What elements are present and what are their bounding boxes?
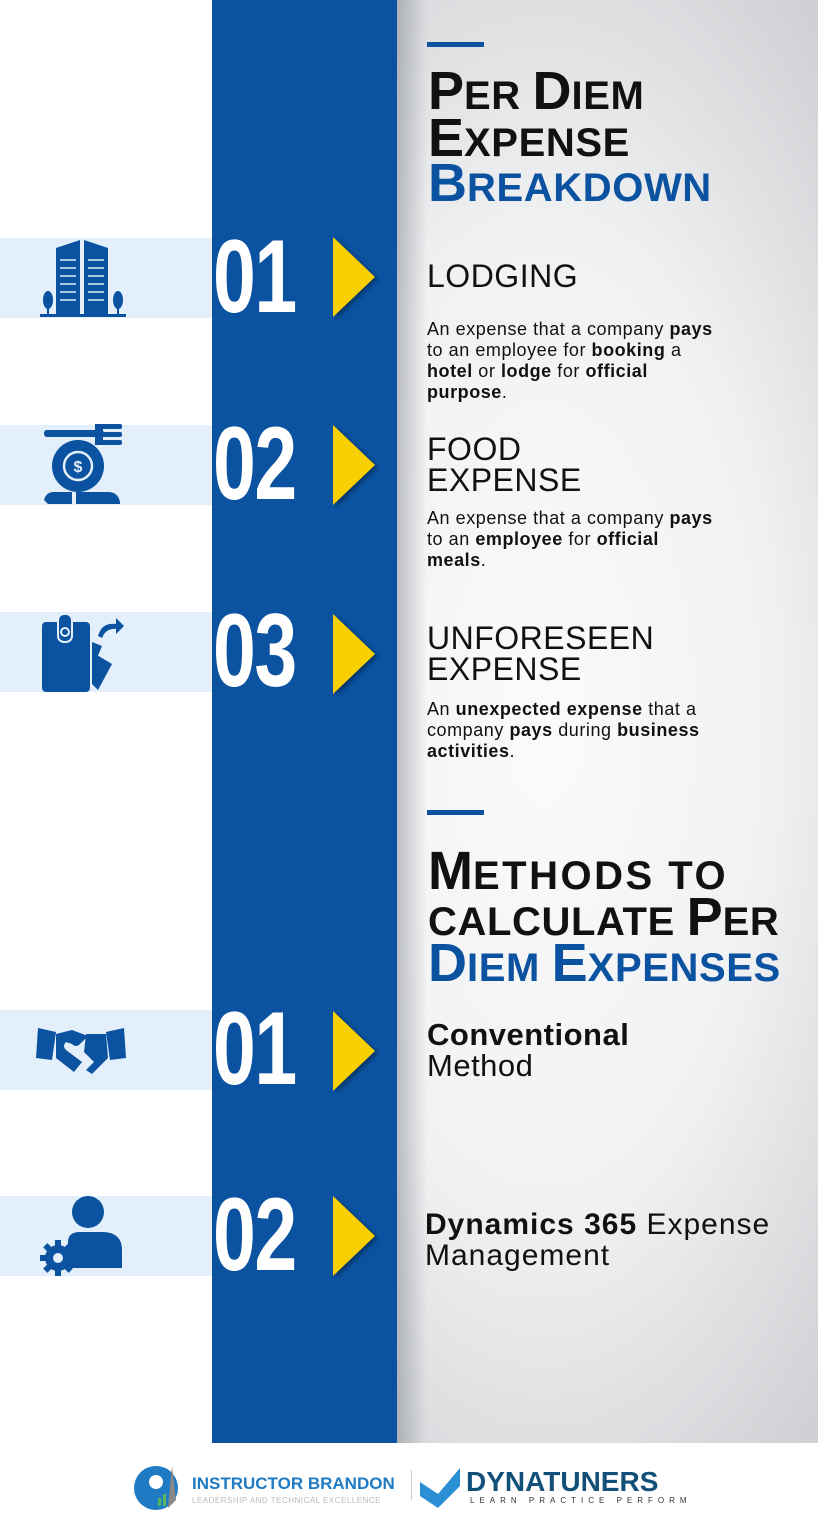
footer logos: LEARN PRACTICE PERFORM xyxy=(470,1496,692,1505)
item: unforeseen xyxy=(427,620,654,687)
item: food: FOOD xyxy=(427,431,521,467)
footer logos: DYNATUNERS xyxy=(466,1466,658,1497)
text: company pays during business xyxy=(427,720,700,740)
method 1: Method xyxy=(427,1048,533,1083)
title 1: BREAKDOWN xyxy=(428,153,712,213)
footer logos xyxy=(134,1466,692,1510)
text: to an employee for official xyxy=(427,529,659,549)
text: activities. xyxy=(427,741,515,761)
icon: person gear xyxy=(40,1196,122,1276)
text: An expense that a company pays xyxy=(427,508,713,528)
footer logos: INSTRUCTOR BRANDON xyxy=(192,1474,395,1493)
title 1 xyxy=(427,42,712,213)
item: unforeseen: EXPENSE xyxy=(427,651,582,687)
text: to an employee for booking a xyxy=(427,340,682,360)
text: 02 xyxy=(213,406,296,522)
method 2: Dynamics 365 Expense xyxy=(425,1208,770,1241)
title 2 xyxy=(427,810,781,993)
title 2: DIEM EXPENSES xyxy=(428,933,781,993)
arrows xyxy=(333,237,375,317)
title 2: METHODS TO xyxy=(428,841,728,901)
text: hotel or lodge for official xyxy=(427,361,648,381)
text: meals. xyxy=(427,550,486,570)
right panel background xyxy=(397,0,818,1443)
icon: building xyxy=(40,240,126,317)
stripes xyxy=(0,238,212,318)
item: unforeseen: UNFORESEEN xyxy=(427,620,654,656)
numbers: 01 xyxy=(213,219,296,335)
item: food: EXPENSE xyxy=(427,462,582,498)
icon: handshake xyxy=(36,1028,126,1074)
text: An unexpected expense that a xyxy=(427,699,697,719)
footer logos: LEADERSHIP AND TECHNICAL EXCELLENCE xyxy=(192,1496,381,1505)
method 2: Management xyxy=(425,1239,610,1272)
text: An expense that a company pays xyxy=(427,319,713,339)
text: 03 xyxy=(213,593,296,709)
item: food xyxy=(427,431,582,498)
blue column xyxy=(212,0,397,1443)
method 2 xyxy=(425,1208,770,1272)
icon: wallet cards xyxy=(42,615,124,692)
item: lodging: LODGING xyxy=(427,258,578,294)
text: 02 xyxy=(213,1177,296,1293)
text: 01 xyxy=(213,991,296,1107)
title 1: EXPENSE xyxy=(428,108,630,168)
icon: food money xyxy=(44,424,122,504)
method 1 xyxy=(427,1017,629,1083)
text: purpose. xyxy=(427,382,507,402)
title 1: PER DIEM xyxy=(428,61,644,121)
method 1: Conventional xyxy=(427,1017,629,1052)
icon: food money: $ xyxy=(74,459,83,476)
title 2: CALCULATE PER xyxy=(428,887,779,947)
